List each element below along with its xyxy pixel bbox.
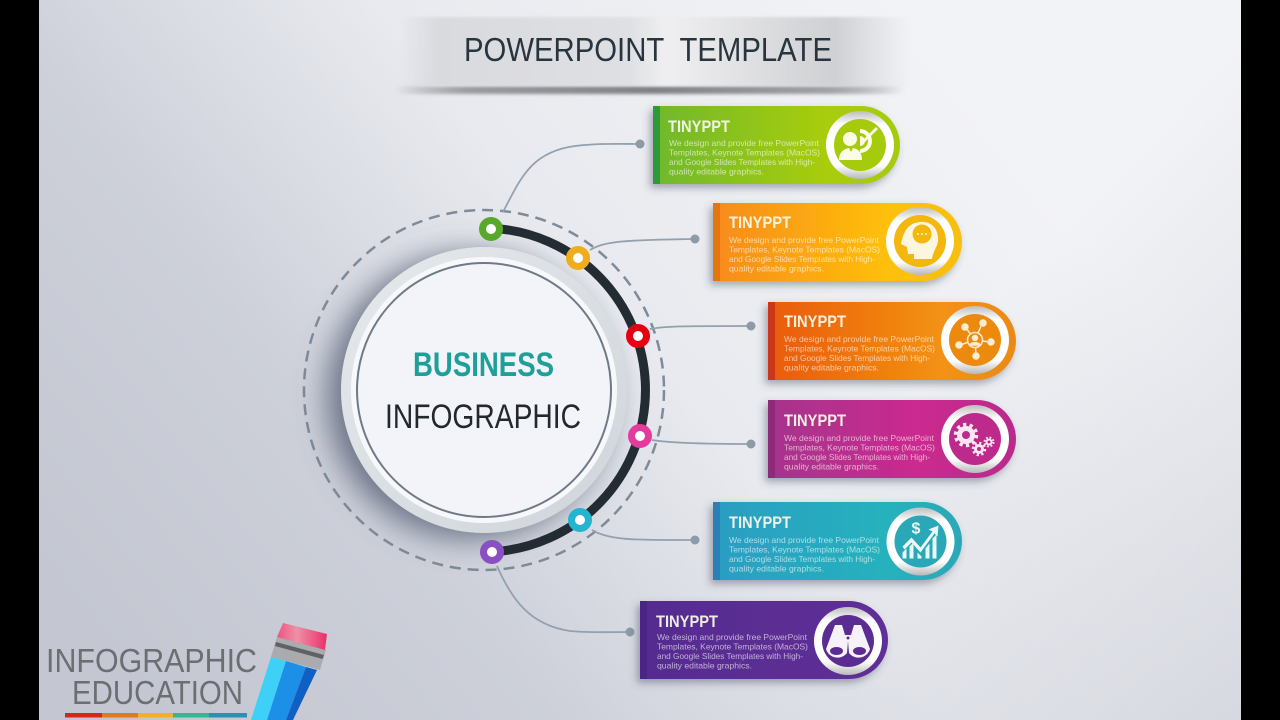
card text: Templates, Keynote Templates (MacOS) bbox=[729, 246, 880, 254]
card text: quality editable graphics. bbox=[784, 364, 879, 372]
icon ring bbox=[814, 607, 882, 675]
arc nodes bbox=[482, 220, 648, 560]
panel: yellow card bbox=[713, 203, 962, 281]
icon ring bbox=[941, 405, 1009, 473]
card text: We design and provide free PowerPoint bbox=[657, 633, 808, 642]
icon: gears bbox=[956, 424, 994, 455]
icon: head with speech bubble bbox=[901, 222, 938, 259]
icon: binoculars bbox=[826, 625, 870, 658]
card text: Templates, Keynote Templates (MacOS) bbox=[669, 148, 820, 158]
dark arc bbox=[491, 228, 645, 552]
card heading: TINYPPT bbox=[784, 412, 846, 430]
card text: We design and provide free PowerPoint bbox=[669, 139, 820, 148]
card text: and Google Slides Templates with High- bbox=[729, 255, 875, 264]
card text: We design and provide free PowerPoint bbox=[729, 536, 880, 545]
card text: and Google Slides Templates with High- bbox=[784, 354, 930, 363]
connector lines bbox=[497, 140, 756, 636]
card text: and Google Slides Templates with High- bbox=[669, 158, 815, 167]
dashed orbit ring bbox=[304, 210, 664, 570]
heading: infographic: INFOGRAPHIC bbox=[385, 398, 581, 436]
card text: We design and provide free PowerPoint bbox=[784, 335, 935, 344]
card text: We design and provide free PowerPoint bbox=[729, 236, 880, 245]
logo: infographic education bbox=[46, 623, 327, 720]
card text: quality editable graphics. bbox=[669, 168, 764, 176]
card text: and Google Slides Templates with High- bbox=[729, 555, 875, 564]
logo text line 1: INFOGRAPHIC bbox=[46, 642, 257, 679]
panel: teal card bbox=[713, 502, 962, 580]
icon ring bbox=[886, 207, 954, 275]
panel: magenta card bbox=[768, 400, 1016, 478]
card text: quality editable graphics. bbox=[657, 662, 752, 670]
card heading: TINYPPT bbox=[656, 613, 718, 631]
title banner bbox=[395, 17, 913, 94]
icon ring bbox=[941, 306, 1009, 374]
card heading: TINYPPT bbox=[729, 514, 791, 532]
logo text line 2: EDUCATION bbox=[72, 674, 243, 711]
card text: Templates, Keynote Templates (MacOS) bbox=[657, 642, 808, 652]
icon: network hub bbox=[956, 320, 994, 359]
panel: orange card bbox=[768, 302, 1016, 380]
card heading: TINYPPT bbox=[729, 214, 791, 232]
card text: and Google Slides Templates with High- bbox=[784, 453, 930, 462]
card text: quality editable graphics. bbox=[784, 462, 879, 472]
icon: rising chart with dollar bbox=[902, 520, 938, 558]
card text: Templates, Keynote Templates (MacOS) bbox=[784, 444, 935, 452]
card text: Templates, Keynote Templates (MacOS) bbox=[784, 344, 935, 354]
panel: green card bbox=[653, 106, 900, 184]
card text: and Google Slides Templates with High- bbox=[657, 652, 803, 661]
icon: rising chart with dollar: $ bbox=[912, 520, 920, 538]
icon ring bbox=[826, 111, 894, 179]
card text: We design and provide free PowerPoint bbox=[784, 434, 935, 443]
heading: business: BUSINESS bbox=[413, 346, 554, 384]
icon ring bbox=[886, 508, 954, 576]
logo colour bar bbox=[65, 713, 247, 718]
card text: quality editable graphics. bbox=[729, 264, 824, 274]
card text: Templates, Keynote Templates (MacOS) bbox=[729, 546, 880, 554]
card text: quality editable graphics. bbox=[729, 564, 824, 574]
card heading: TINYPPT bbox=[784, 313, 846, 331]
card heading: TINYPPT bbox=[668, 118, 730, 136]
title: POWERPOINT TEMPLATE bbox=[464, 31, 832, 68]
icon: person and target bbox=[839, 127, 878, 160]
icon: pencil bbox=[251, 623, 327, 720]
central circle bbox=[341, 247, 627, 533]
panel: purple card bbox=[640, 601, 888, 679]
